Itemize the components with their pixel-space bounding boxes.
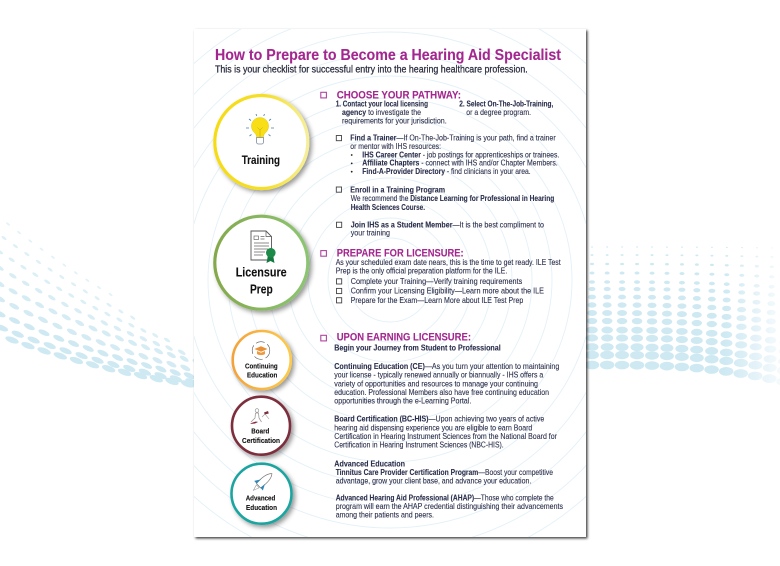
block: advanced education: Advanced Hearing Aid Professional (AHAP)—Those who complete the (336, 494, 554, 503)
label: Advanced: Advanced (246, 494, 276, 503)
item: find a trainer (336, 134, 559, 176)
badge: Advanced Education (232, 464, 292, 524)
block: advanced education: program will earn the AHAP credential distinguishing their advancements (336, 502, 563, 511)
panel: checklist page (194, 29, 586, 537)
label: Licensure: Licensure (236, 266, 287, 280)
step 1 (336, 100, 447, 125)
block: board certification: Certification in Hearing Instrument Sciences (NBC-HIS). (334, 440, 504, 449)
block: board certification: Certification in Hearing Instrument Sciences from the National Board for (334, 432, 557, 441)
block: continuing education: variety of opportunities and resources to manage your continuing (334, 379, 538, 388)
label: Certification: Certification (242, 436, 280, 445)
icon: rocket (249, 469, 276, 495)
label: Education: Education (246, 503, 277, 512)
background dots: left halftone (0, 217, 218, 412)
item: find a trainer: or mentor with IHS resources: (350, 142, 441, 151)
heading: prepare for licensure: PREPARE FOR LICENSURE: (337, 247, 464, 259)
step 2: 2. Select On-The-Job-Training, (459, 100, 553, 109)
block: continuing education: Continuing Education (CE)—As you turn your attention to maintaining (334, 362, 559, 371)
item: find a trainer: Affiliate Chapters - connect with IHS and/or Chapter Members. (362, 159, 558, 168)
badge: Training (215, 96, 308, 188)
heading: choose your pathway: CHOOSE YOUR PATHWAY: (337, 89, 461, 101)
item: join ihs: your training (351, 229, 390, 238)
block: advanced education: advantage, grow your client base, and advance your education. (336, 476, 531, 485)
item: confirm your licensing eligibility: Confirm your Licensing Eligibility—Learn more about the ILE (351, 286, 544, 296)
item: join ihs: Join IHS as a Student Member—It is the best compliment to (351, 220, 544, 229)
label: Training: Training (242, 155, 280, 167)
block: board certification (334, 415, 557, 449)
step 2 (459, 100, 553, 117)
label: Prep: Prep (250, 282, 273, 296)
block: advanced education: Advanced Education (334, 459, 405, 468)
subheading: Begin your Journey from Student to Professional (334, 344, 501, 353)
intro text (336, 258, 561, 275)
item: enroll in a training program (336, 185, 554, 212)
section: choose your pathway (321, 89, 559, 238)
step 2: or a degree program. (466, 108, 531, 117)
step 1: 1. Contact your local licensing (336, 100, 428, 109)
icon: light bulb (246, 114, 274, 144)
item: enroll in a training program: Enroll in a Training Program (350, 185, 445, 194)
item: complete your training: Complete your Training—Verify training requirements (351, 276, 522, 286)
section: upon earning licensure (321, 332, 563, 520)
block: advanced education (334, 459, 563, 520)
item: find a trainer: Find a Trainer—If On-The-Job-Training is your path, find a trainer (350, 134, 556, 143)
block: continuing education: opportunities through the e-Learning Portal. (334, 396, 471, 405)
step 1: requirements for your jurisdiction. (342, 116, 447, 125)
item: enroll in a training program: We recommend the Distance Learning for Professional in Hearing (351, 194, 554, 203)
intro text: Prep is the only official preparation platform for the ILE. (336, 266, 507, 275)
item: find a trainer: Find-A-Provider Directory - find clinicians in your area. (362, 167, 531, 176)
block: continuing education: your license - typically renewed annually or biannually - IHS offers a (334, 371, 544, 380)
label: Continuing: Continuing (245, 361, 278, 370)
block: continuing education: education. Professional Members also have free continuing education (334, 388, 549, 397)
label: Board: Board (251, 426, 270, 435)
block: advanced education: among their patients and peers. (336, 511, 434, 520)
background dots: right halftone (592, 247, 780, 383)
item: find a trainer: IHS Career Center - job postings for apprenticeships or trainees. (362, 150, 559, 159)
badge: Continuing Education (233, 331, 291, 389)
block: advanced education: Tinnitus Care Provider Certification Program—Boost your competitive (336, 468, 553, 477)
badge: Board Certification (232, 397, 290, 455)
badge: Licensure Prep (215, 216, 308, 309)
intro text: As your scheduled exam date nears, this is the time to get ready. ILE Test (336, 258, 561, 267)
icon: certificate (251, 231, 276, 263)
checkbox (321, 251, 326, 256)
item: join ihs (336, 220, 544, 238)
checkbox (321, 335, 326, 341)
block: board certification: hearing aid dispensing experience you are eligible to earn Board (334, 423, 532, 432)
icon: graduation cap (252, 342, 270, 359)
label: Education: Education (247, 370, 278, 379)
block: continuing education (334, 362, 559, 405)
subtitle: This is your checklist for successful entry into the hearing healthcare profession. (215, 65, 528, 76)
checkbox (321, 92, 326, 98)
section: prepare for licensure (321, 247, 561, 305)
item: prepare for the exam: Prepare for the Exam—Learn More about ILE Test Prep (351, 295, 524, 305)
item: enroll in a training program: Health Sciences Course. (351, 203, 425, 212)
heading: upon earning licensure: UPON EARNING LICENSURE: (337, 332, 471, 344)
title: How to Prepare to Become a Hearing Aid Specialist (215, 47, 561, 64)
icon: climber with flag (250, 409, 269, 424)
step 1: agency to investigate the (342, 108, 421, 117)
block: board certification: Board Certification (BC-HIS)—Upon achieving two years of active (334, 415, 545, 424)
